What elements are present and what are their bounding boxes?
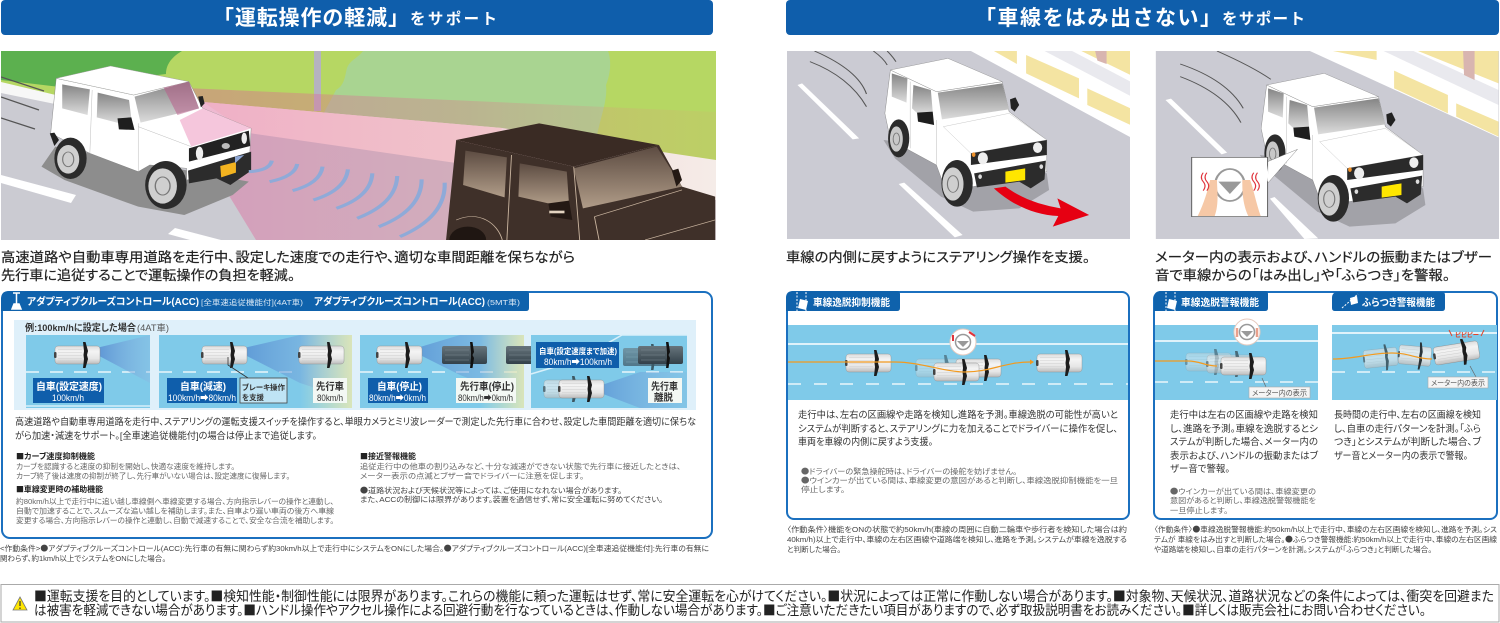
text: prevention notes (801, 466, 1118, 494)
text: curve speed control: ■カーブ速度抑制機能 (16, 451, 95, 462)
text: proximity warning: 追従走行中の他車の割り込みなど、十分な減速ができない状態で先行車に接近したときは、 (360, 461, 681, 471)
text: ACC notes: また、ACCの制御には限界があります。装置を過信せず、常に安全運転に努めてください。 (360, 494, 663, 504)
panel: safety warning (1, 584, 1499, 622)
text: safety warning copy (34, 585, 1494, 619)
text: wobble description (1334, 409, 1482, 462)
tab: ACC title (1, 291, 529, 311)
text: ACC description (15, 416, 696, 442)
text: lane change assist: 自動で加速することで、スムーズな追い越しを補助します。また、自車より遅い車両の後方へ車線 (16, 506, 334, 516)
text: ACC operating conditions: <作動条件>●アダプティブクルーズコントロール(ACC):先行車の有無に関わらず約30km/h以上で走行中にシステムをONにした場合。 ●アダプティブクルーズコントロール(ACC)[全車速追従機能付]:先行車の有無に (0, 543, 709, 554)
text: warning description: し、進路を予測。車線を逸脱するとシ (1170, 423, 1318, 435)
diagram step 1: set speed (26, 335, 150, 408)
diagram background: 100km/h example: 例:100km/hに設定した場合 (25, 322, 136, 334)
text: lane change assist: ■車線変更時の補助機能 (16, 484, 103, 495)
diagram step 1: set speed: 100km/h (52, 393, 84, 403)
diagram step 3: stop: 自車(停止) (377, 380, 422, 393)
text: safety warning copy: は被害を軽減できない場合があります。■ハンドル操作やアクセル操作による回避行動を行なっているときは、作動しない場合があります。■ご注意いただきたい項目がありますので、必ず取扱説明書をお読みください。■詳しくは販売会社にお問い合わせください。 (34, 599, 1426, 619)
header: 運転操作の軽減 (1, 0, 713, 35)
text: prevention operating conditions: と判断した場合。 (787, 544, 841, 554)
text: prevention notes: 停止します。 (801, 484, 845, 494)
text: wobble description: 長時間の走行中、左右の区画線を検知 (1334, 409, 1481, 421)
text: prevention description: システムが判断すると、ステアリングに力を加えることでドライバーに操作を促し、 (798, 423, 1118, 435)
text: prevention notes: ●ドライバーの緊急操舵時は、ドライバーの操舵を妨げません。 (801, 466, 1017, 477)
text: proximity warning (360, 451, 681, 480)
header: 車線をはみ出さない (786, 0, 1499, 35)
text: prevention description (798, 409, 1118, 448)
diagram step 3: stop (360, 335, 551, 408)
diagram step 2: decelerate (159, 335, 352, 408)
diagram step 3: stop: 80km/h➡0km/h (458, 393, 513, 403)
text: warning note: ●ウインカーが出ている間は、車線変更の (1170, 486, 1316, 497)
diagram: lane departure warning road (1155, 319, 1318, 400)
icon: steering wheel with arrows (950, 329, 976, 355)
diagram step 2: decelerate: 自車(減速) (180, 380, 226, 393)
text: curve speed control: カーブを認識すると速度の抑制を開始し、快適な速度を維持します。 (16, 461, 235, 471)
diagram step 2: decelerate: を支援 (242, 392, 264, 402)
text: proximity warning: メーター表示の点滅とブザー音でドライバーに注意を促します。 (360, 470, 584, 480)
diagram step 4: lead car departs: 80km/h➡100km/h (544, 357, 612, 367)
diagram step 2: decelerate: 80km/h (317, 393, 343, 403)
icon: white car (1260, 73, 1425, 227)
diagram step 4: lead car departs (531, 335, 687, 408)
text: warning operating conditions: 〈作動条件〉●車線逸脱警報機能:約50km/h以上で走行中、車線の左右区画線を検知し、進路を予測。シス (1154, 524, 1497, 535)
illustration: ACC following scene (1, 51, 716, 253)
diagram step 2: decelerate: ブレーキ操作 (242, 382, 285, 392)
text: lead copy ACC: 高速道路や自動車専用道路を走行中、設定した速度での走行や、適切な車間距離を保ちながら (1, 249, 575, 265)
header: 運転操作の軽減: 「運転操作の軽減」 (213, 6, 409, 30)
illustration: lane departure warning scene (1156, 51, 1500, 239)
tab: ACC title: [全車速追従機能付](4AT車) (201, 297, 304, 307)
icon: radar waves (249, 161, 445, 237)
text: ACC description: 高速道路や自動車専用道路を走行中、ステアリングの運転支援スイッチを操作すると、単眼カメラとミリ波レーダーで測定した先行車に合わせ、設定した車間距離を適切に保ちな (15, 416, 696, 428)
icon: white car (884, 58, 1049, 212)
callout: vibrating steering wheel inset (1192, 149, 1298, 217)
text: prevention operating conditions (787, 524, 1127, 554)
tab: lane departure prevention: 車線逸脱抑制機能 (813, 296, 890, 309)
tab: lane departure warning (1154, 291, 1268, 311)
text: prevention operating conditions: 〈作動条件〉機能をONの状態で約50km/h(車線の周囲に自動二輪車や歩行者を検知した場合は約 (787, 524, 1127, 534)
text: prevention description: 車両を車線の内側に戻すよう支援。 (798, 436, 933, 448)
text: ACC notes (360, 485, 663, 504)
text: wobble description: し、自車の走行パターンを計測。「ふら (1334, 423, 1481, 435)
icon: vibrating steering wheel (1234, 319, 1260, 345)
diagram: road with lane correction (788, 325, 1128, 400)
tab: ACC title: (5MT車) (487, 297, 521, 307)
text: lane change assist (16, 484, 334, 525)
text: warning operating conditions: や道路端を検知し、自車の走行パターンを計測。システムが「ふらつき」と判断した場合。 (1154, 544, 1432, 554)
text: prevention notes: ●ウインカーが出ている間は、車線変更の意図があると判断し、車線逸脱抑制機能を一旦 (801, 475, 1118, 486)
text: prevention operating conditions: 40km/h)以上で走行中、車線の左右区画線や道路端を検知し、進路を予測。システムが車線を逸脱する (787, 534, 1127, 544)
diagram: wobble warning road: メーター内の表示 (1431, 378, 1485, 388)
arrow: red steering correction (994, 187, 1089, 227)
text: safety warning copy: ■運転支援を目的としています。■検知性能・制御性能には限界があります。これらの機能に頼った運転はせず、常に安全運転を心がけてください。■状況によっては正常に作動しない場合があります。■対象物、天候状況、道路状況などの条件によっては、衝突を回避また (34, 585, 1494, 605)
diagram step 4: lead car departs: 離脱 (654, 391, 673, 404)
header: 車線をはみ出さない: 「車線をはみ出さない」 (975, 7, 1221, 30)
text: warning note: 意図があると判断し、車線逸脱警報機能を (1170, 495, 1316, 505)
text: curve speed control (16, 451, 290, 480)
text: warning description: ザー音で警報。 (1170, 463, 1230, 475)
tab: wobble warning: ふらつき警報機能 (1362, 296, 1435, 309)
text: warning operating conditions: テムが 車線をはみ出すと判断した場合。●ふらつき警報機能:約50km/h以上で走行中、車線の左右区画線 (1154, 534, 1497, 545)
diagram step 4: lead car departs: 自車(設定速度まで加速) (539, 346, 617, 356)
icon: warning triangle (13, 597, 27, 610)
tab: lane departure prevention (786, 291, 900, 311)
text: prevention description: 走行中は、左右の区画線や走路を検知し進路を予測。車線逸脱の可能性が高いと (798, 409, 1118, 421)
text: warning description: 走行中は左右の区画線や走路を検知 (1170, 409, 1318, 421)
diagram background: 100km/h example: (4AT車) (137, 322, 169, 333)
tab: lane departure warning: 車線逸脱警報機能 (1181, 296, 1259, 309)
text: lead copy ACC (1, 249, 575, 283)
text: ACC description: がら加速・減速をサポート。[全車速追従機能付]の場合は停止まで追従します。 (15, 430, 317, 442)
text: ACC operating conditions (0, 543, 709, 563)
text: lead copy lane warning: メーター内の表示および、ハンドルの振動またはブザー (1155, 249, 1492, 265)
diagram step 2: decelerate: 先行車 (316, 380, 344, 393)
diagram step 2: decelerate: 100km/h➡80km/h (168, 393, 236, 403)
diagram background: 100km/h example (14, 320, 696, 410)
text: lane change assist: 変更する場合、方向指示レバーの操作と連動し、自動で減速することで、安全な合流を補助します。 (16, 515, 334, 525)
text: ACC operating conditions: 関わらず、約1km/h以上でシステムをONにした場合。 (0, 553, 166, 563)
panel: ACC (1, 291, 712, 538)
text: warning note: 一旦停止します。 (1170, 505, 1228, 515)
diagram step 1: set speed: 自車(設定速度) (36, 380, 102, 393)
text: wobble description: つき」とシステムが判断した場合、ブ (1334, 436, 1482, 448)
tab: ACC title: アダプティブクルーズコントロール(ACC) (27, 295, 199, 308)
panel: lane departure warning and wobble warning (1154, 291, 1497, 519)
diagram: wobble warning road: ピピピー (1455, 331, 1479, 339)
tab: wobble warning (1332, 292, 1445, 311)
text: lead copy ACC: 先行車に追従することで運転操作の負担を軽減。 (1, 267, 295, 283)
header: 車線をはみ出さない: をサポート (1222, 10, 1305, 28)
tab: ACC title: アダプティブクルーズコントロール(ACC) (314, 295, 485, 308)
illustration: lane departure prevention scene (787, 51, 1131, 239)
text: curve speed control: カーブ終了後は速度の抑制が終了し、先行車がいない場合は、設定速度に復帰します。 (16, 470, 290, 480)
text: proximity warning: ■接近警報機能 (360, 451, 416, 462)
icon: dark leading car (446, 123, 715, 253)
text: warning description (1170, 409, 1319, 475)
diagram step 4: lead car departs: 先行車 (651, 380, 678, 393)
text: lead copy lane warning: 音で車線からの「はみ出し」や「ふらつき」を警報。 (1155, 267, 1450, 283)
text: lead copy lane warning (1155, 249, 1492, 283)
panel: lane departure prevention (786, 291, 1129, 519)
text: lane change assist: 約80km/h以上で走行中に追い越し車線側へ車線変更する場合、方向指示レバーの操作と連動し、 (16, 496, 334, 506)
text: warning operating conditions (1154, 524, 1497, 554)
diagram: wobble warning road (1332, 325, 1497, 400)
header: 運転操作の軽減: をサポート (410, 10, 497, 28)
text: lead copy lane prevention: 車線の内側に戻すようにステアリング操作を支援。 (786, 250, 1090, 265)
diagram: lane departure warning road: メーター内の表示 (1252, 388, 1307, 398)
icon: white car front-left view (41, 66, 251, 215)
text: wobble description: ザー音とメーター内の表示で警報。 (1334, 450, 1468, 462)
text: ACC notes: ●道路状況および天候状況等によっては、ご使用になれない場合があります。 (360, 485, 622, 496)
text: warning description: 表示および、ハンドルの振動またはブ (1170, 450, 1319, 462)
diagram step 3: stop: 先行車(停止) (460, 380, 514, 393)
diagram step 3: stop: 80km/h➡0km/h (369, 393, 426, 403)
text: warning note (1170, 486, 1316, 515)
text: warning description: ステムが判断した場合、メーター内の (1170, 436, 1318, 448)
